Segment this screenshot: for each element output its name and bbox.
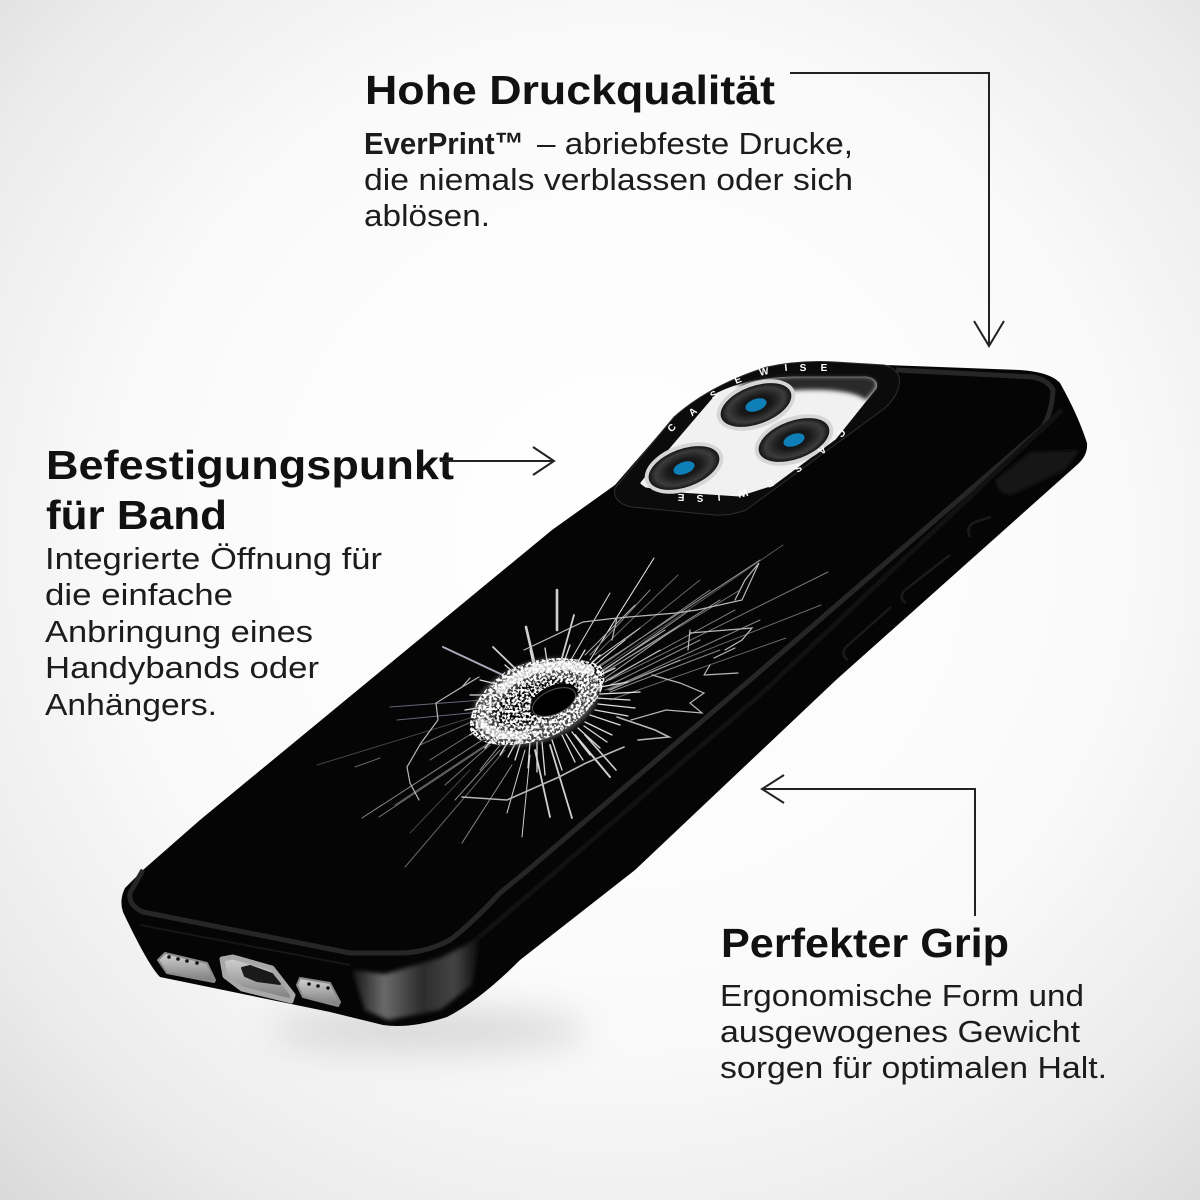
brand lettering bottom: A [815,443,828,456]
lens 2 [748,404,840,476]
brand lettering top: W [758,366,770,379]
body text: EverPrint™ [364,126,524,161]
brand lettering top: S [709,389,720,402]
brand lettering bottom: S [696,492,704,503]
concentric cracks [407,563,759,800]
brand lettering bottom: I [717,491,721,502]
arrow: to side grip [762,775,975,916]
body text: – abriebfeste Drucke, [537,126,853,161]
second side rim line [470,410,1062,945]
heading: Befestigungspunkt [46,442,454,488]
body text: Anbringung eines [45,614,313,649]
heading [46,442,454,538]
brand lettering bottom: E [677,491,685,502]
camera module [615,362,899,515]
body text: ablösen. [364,198,490,233]
brand lettering top: A [687,406,700,419]
heading: Hohe Druckqualität [365,67,775,113]
impact ring [470,655,604,749]
front face rim [130,370,1053,953]
brand lettering top: E [821,363,828,374]
arrow: to strap attachment [440,447,554,475]
body text: Handybands oder [45,650,319,685]
body text: die niemals verblassen oder sich [364,162,853,197]
callout: Hohe Druckqualität [364,67,853,233]
brand lettering top: C [666,422,679,435]
short spikes around impact [465,645,640,775]
heading: für Band [46,492,227,538]
body text: sorgen für optimalen Halt. [720,1050,1107,1085]
window inner shadow [735,376,877,400]
body text [364,126,853,233]
bottom edge line [140,925,350,965]
brand lettering top: I [784,363,788,374]
charging port [222,957,293,1001]
lens 1 [710,369,802,441]
arrow: to top of case [790,73,1004,346]
long shards [317,545,828,867]
volume and side buttons [843,517,991,660]
body text [720,978,1107,1085]
brand lettering bottom: E [764,476,775,489]
shattered glass print [317,545,828,867]
corner highlight [352,938,480,1020]
callout: Befestigungspunkt für Band [45,442,454,722]
phone case [121,362,1087,1026]
bullet hole [528,682,580,722]
heading: Perfekter Grip [721,920,1009,966]
camera bump frame [615,362,899,515]
body text [45,541,382,722]
body text: Integrierte Öffnung für [45,541,382,576]
brand lettering bottom: C [834,426,847,439]
phone drop shadow [270,1008,590,1052]
lens 3 [638,432,730,504]
brand lettering bottom: W [737,486,749,499]
brand lettering top: S [799,363,807,374]
brand lettering top: E [733,374,744,387]
right speaker [297,978,340,1006]
brand lettering top [666,363,828,435]
left speaker [158,953,215,982]
callout: Perfekter Grip [720,920,1107,1085]
body text: die einfache [45,577,233,612]
camera window [642,378,876,495]
side texture panel [995,450,1080,495]
body text: Anhängers. [45,687,217,722]
brand lettering bottom [677,426,847,503]
body text: Ergonomische Form und [720,978,1084,1013]
case silhouette [121,362,1087,1026]
body text: ausgewogenes Gewicht [720,1014,1080,1049]
brand lettering bottom: S [792,461,803,474]
